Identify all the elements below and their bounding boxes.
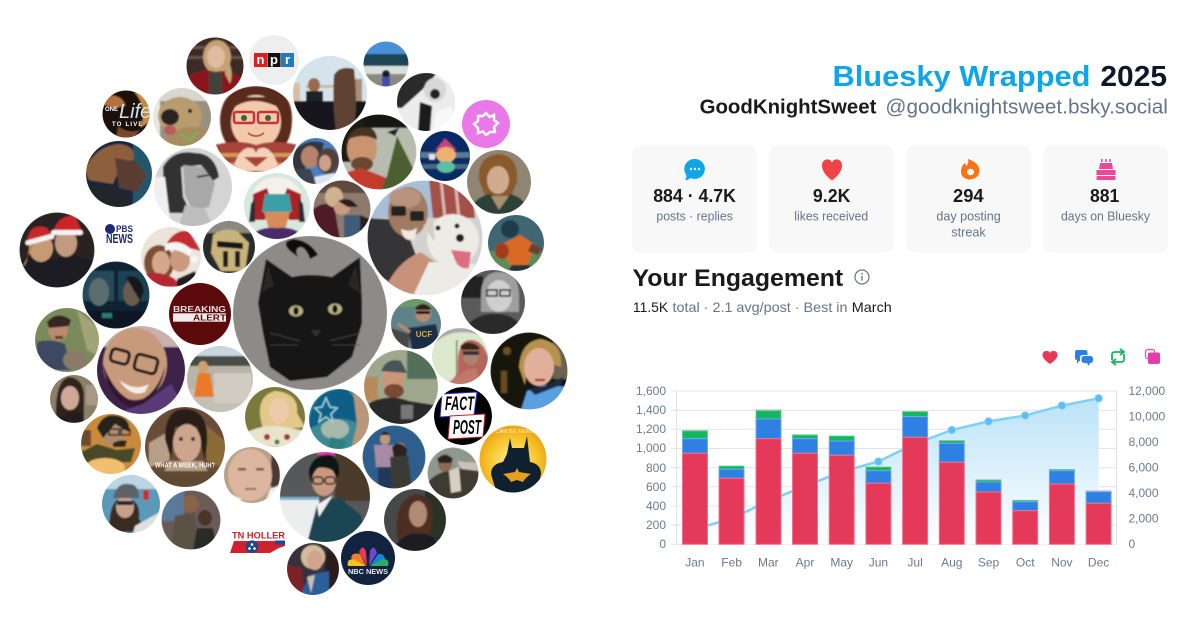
- user name and handle: GoodKnightSweet: [700, 96, 877, 118]
- chart legend icons: [1042, 349, 1160, 366]
- avatar: blonde woman in floral dress: [244, 386, 306, 448]
- panel: avatar bubble cluster: [19, 34, 568, 596]
- right axis labels: [1128, 384, 1166, 551]
- month labels: Jul: [907, 556, 923, 570]
- stat label: days on Bluesky: [1061, 210, 1151, 224]
- avatar: man with glasses in teal suit: [279, 451, 371, 543]
- month labels: Sep: [978, 556, 999, 570]
- month labels: Jan: [685, 556, 705, 570]
- avatar: PBS News logo: NEWS: [106, 231, 133, 246]
- month labels: Feb: [721, 556, 742, 570]
- avatar: cartoon figure on navy: [419, 130, 471, 182]
- avatar: couple with santa hat: [140, 226, 202, 288]
- panel: posting streak stat: streak: [951, 226, 986, 240]
- avatar: woman with braided red hair: [466, 149, 532, 215]
- month labels: Aug: [941, 556, 962, 570]
- avatar: blonde woman in blue: [286, 542, 340, 596]
- avatar: Gatchaman illustration: [243, 172, 311, 240]
- avatar: NPR logo: [249, 35, 299, 85]
- avatar: memoji with heart hands: [213, 86, 299, 173]
- avatar: man in UCF shirt: UCF: [416, 330, 432, 339]
- title: 2025: [1100, 61, 1167, 93]
- avatar: Fact Post logo: [434, 387, 492, 445]
- avatar: Frodo meme: [144, 406, 226, 488]
- avatar: girl in blue star hat: [308, 388, 370, 450]
- left axis labels: 1,600: [636, 384, 666, 398]
- avatar: two sci-fi faces: [82, 261, 150, 329]
- icon: quotes squares: [1146, 350, 1160, 364]
- avatar: black and white illustration: [396, 72, 456, 132]
- stacked bars: [682, 409, 1112, 544]
- stat value: 881: [1090, 186, 1119, 206]
- icon: speech bubble: [684, 159, 705, 180]
- right axis labels: 10,000: [1128, 410, 1166, 424]
- month labels: [685, 556, 1109, 570]
- avatar: woman with long brown hair: [383, 488, 447, 552]
- month labels: May: [830, 556, 853, 570]
- avatar: One Life to Live logo: [102, 90, 151, 138]
- avatar: woman with windswept hair: [85, 140, 153, 208]
- avatar: black and white woman with glasses: [460, 269, 526, 335]
- avatar: woman in hood under umbrella: [431, 327, 490, 386]
- left axis labels: 1,200: [636, 422, 666, 436]
- avatar: One Life to Live logo: ONE: [105, 107, 118, 113]
- month labels: Jun: [869, 556, 888, 570]
- icon: flame: [961, 159, 979, 180]
- avatar: man beside christmas tree: [341, 114, 417, 190]
- right axis labels: 6,000: [1128, 460, 1159, 474]
- avatar: TN Holler logo: TN HOLLER: [232, 530, 285, 542]
- avatar: man in UCF shirt: [390, 298, 442, 350]
- avatar: man with pug: [34, 307, 100, 373]
- month labels: Nov: [1051, 556, 1073, 570]
- month labels: Apr: [796, 556, 814, 570]
- left axis labels: 200: [646, 518, 666, 532]
- avatar: gold knight helmet: [202, 220, 256, 274]
- avatar: ocean with child: [363, 41, 409, 87]
- avatar: couple hugging at convention: [362, 425, 426, 489]
- icon: cake: [1096, 159, 1116, 180]
- stat label: day posting: [936, 210, 1001, 224]
- right axis labels: 8,000: [1128, 435, 1159, 449]
- avatar: football player: [487, 214, 545, 272]
- avatar: One Life to Live logo: Life: [119, 101, 151, 123]
- stat value: 9.2K: [813, 186, 850, 206]
- right axis labels: 12,000: [1128, 384, 1166, 398]
- avatar: pink starburst badge: [462, 100, 510, 148]
- heading: Your Engagement: Your Engagement: [632, 265, 843, 292]
- left axis labels: 0: [659, 537, 666, 551]
- avatar: Fact Post logo: POST: [453, 417, 482, 439]
- avatar: TN Holler logo: [230, 530, 285, 553]
- avatar: close-up man's face: [223, 446, 281, 504]
- avatar: child and dog at window: [292, 55, 368, 131]
- avatar: One Life to Live logo: TO LIVE: [112, 122, 144, 128]
- panel: posting streak stat: [906, 145, 1031, 253]
- user name and handle: @goodknightsweet.bsky.social: [885, 96, 1168, 118]
- left axis labels: 1,000: [636, 441, 666, 455]
- avatar: mother and daughter: [312, 179, 372, 239]
- cumulative area and line: [695, 394, 1102, 544]
- engagement summary text: total · 2.1 avg/post · Best in: [672, 299, 848, 315]
- avatar: Batman on yellow: [479, 425, 547, 494]
- engagement summary text: 11.5K: [633, 299, 669, 315]
- avatar: bearded man with hat: [363, 349, 439, 425]
- avatar: couple close together: [292, 137, 340, 185]
- avatar: man with blanket: [427, 447, 479, 499]
- avatar: black and white portrait: [153, 147, 233, 227]
- icon: likes heart: [1042, 351, 1058, 364]
- avatar: couple in santa hats: [19, 212, 95, 288]
- stat label: posts · replies: [656, 210, 733, 224]
- avatar: woman in hat by the sea: [101, 474, 161, 534]
- stat label: likes received: [794, 210, 868, 224]
- avatar: NPR logo: p: [270, 52, 278, 67]
- icon: heart: [822, 159, 842, 180]
- chart: monthly engagement bars with cumulative line: [636, 384, 1166, 570]
- avatar: NPR logo: r: [285, 52, 290, 67]
- month labels: Mar: [758, 556, 779, 570]
- avatar: man with white dog: [367, 180, 483, 296]
- icon: replies bubbles: [1075, 350, 1093, 366]
- avatar: Breaking Alert badge: [169, 283, 231, 345]
- stat value: 294: [953, 186, 984, 206]
- left axis labels: 1,400: [636, 403, 666, 417]
- month labels: Dec: [1088, 556, 1109, 570]
- icon: info: [855, 270, 869, 284]
- panel: days on Bluesky stat: [1043, 145, 1168, 253]
- avatar: PBS News logo: [105, 224, 133, 246]
- avatar: Frodo meme: WHAT A WEEK, HUH?: [155, 462, 215, 470]
- avatar: black cat (largest bubble): [232, 235, 388, 391]
- avatar: NPR logo: n: [257, 52, 265, 67]
- avatar: Fact Post logo: FACT: [445, 394, 475, 415]
- avatar: Breaking Alert badge: ALERT: [193, 313, 227, 323]
- left axis labels: [636, 384, 666, 551]
- right axis labels: 2,000: [1128, 512, 1159, 526]
- left axis labels: 400: [646, 499, 666, 513]
- avatar: NBC News logo: [341, 531, 395, 585]
- avatar: man with glasses and guitar: [80, 413, 142, 478]
- avatar: tan dog: [153, 88, 211, 146]
- month labels: Oct: [1016, 556, 1035, 570]
- avatar: NBC News logo: NBC NEWS: [348, 567, 388, 576]
- engagement summary text: [633, 299, 892, 315]
- left axis labels: 800: [646, 461, 666, 475]
- right axis labels: 4,000: [1128, 486, 1159, 500]
- user name and handle: [700, 96, 1168, 118]
- right axis labels: 0: [1128, 537, 1136, 551]
- stat value: 884 · 4.7K: [653, 186, 736, 206]
- panel: posts and replies stat: [632, 145, 757, 253]
- title: Bluesky Wrapped: [832, 61, 1090, 93]
- avatar: two men close up: [161, 490, 221, 550]
- avatar: PBS News logo: PBS: [116, 224, 133, 234]
- avatar: girl in red jacket: [186, 38, 244, 94]
- avatar: woman in orange dress: [186, 345, 254, 413]
- panel: likes stat: [769, 145, 894, 253]
- left axis labels: 600: [646, 480, 666, 494]
- avatar: Breaking Alert badge: BREAKING: [173, 305, 226, 314]
- avatar: smiling man in purple: [96, 325, 186, 415]
- avatar: Batman on yellow: I CAN BE HERE: [492, 429, 534, 435]
- icon: reposts arrows: [1112, 349, 1124, 365]
- engagement summary text: March: [852, 299, 892, 315]
- avatar: blonde woman in blue turtleneck: [490, 332, 568, 410]
- avatar: smiling woman at home: [49, 374, 99, 424]
